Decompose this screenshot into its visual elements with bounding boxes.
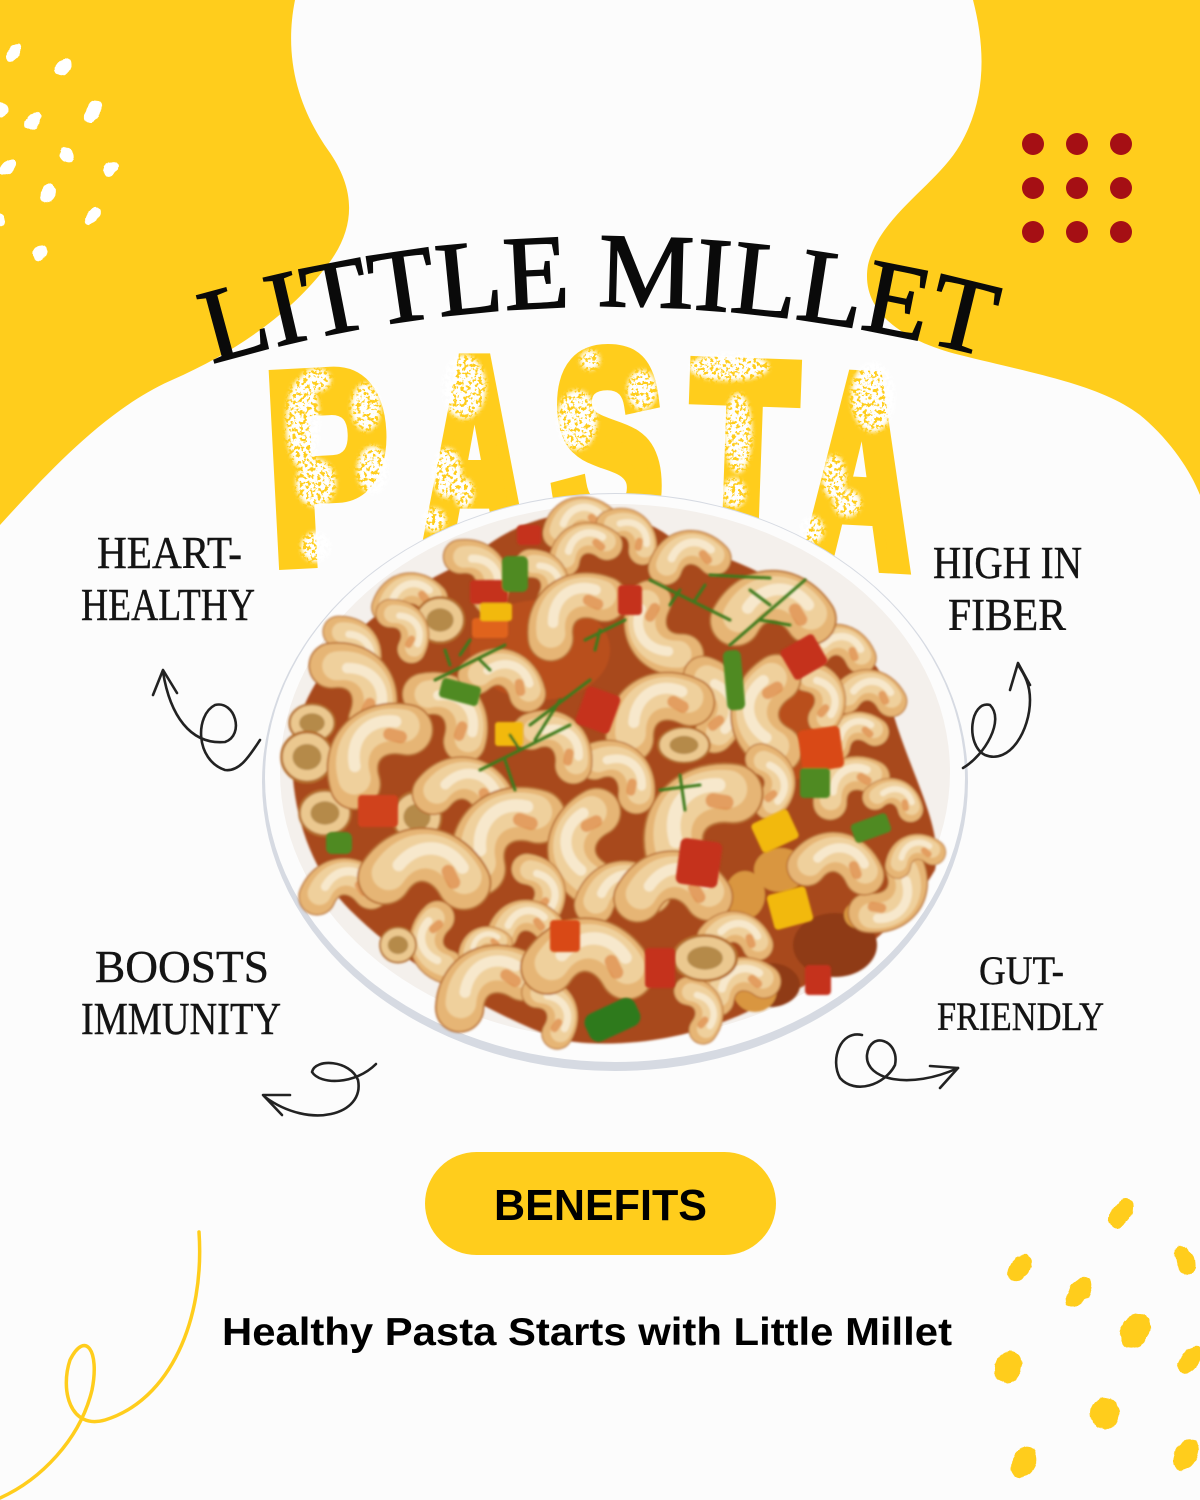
yellow blob: top left bbox=[0, 0, 349, 525]
white speckles: top left bbox=[0, 40, 121, 263]
label: high in fiber bbox=[933, 537, 1082, 640]
pasta food pile bbox=[282, 505, 936, 1044]
label: gut-friendly bbox=[937, 948, 1104, 1039]
vegetables and herbs bbox=[326, 525, 892, 1045]
title word: PASTA: A bbox=[424, 306, 525, 601]
arrow: high in fiber bbox=[963, 663, 1030, 768]
yellow swirl: bottom left bbox=[0, 1232, 200, 1498]
title word: PASTA: S bbox=[553, 299, 662, 594]
label: high in fiber: HIGH IN bbox=[933, 537, 1082, 588]
label: high in fiber: FIBER bbox=[948, 589, 1066, 640]
label: gut-friendly: GUT- bbox=[979, 948, 1064, 993]
yellow blob: top right bbox=[867, 0, 1200, 495]
title word: PASTA: T bbox=[686, 308, 800, 607]
label: boosts immunity: IMMUNITY bbox=[81, 993, 281, 1044]
title line: LITTLE MILLET: LITTLE MILLET bbox=[196, 236, 1003, 364]
label: boosts immunity: BOOSTS bbox=[95, 941, 269, 992]
title word: PASTA bbox=[261, 299, 920, 621]
plate and pasta photo bbox=[262, 493, 968, 1071]
label: boosts immunity bbox=[81, 941, 281, 1044]
arrow: heart-healthy bbox=[153, 670, 260, 770]
title word: PASTA: P bbox=[261, 316, 396, 617]
benefits button bbox=[425, 1152, 776, 1255]
title word: PASTA: A bbox=[800, 321, 920, 621]
red dot grid: top right bbox=[1022, 133, 1132, 243]
label: gut-friendly: FRIENDLY bbox=[937, 994, 1104, 1039]
arrow: boosts immunity bbox=[263, 1063, 376, 1115]
label: heart-healthy: HEALTHY bbox=[81, 579, 255, 630]
plate bbox=[262, 493, 968, 1071]
benefits button: BENEFITS bbox=[494, 1181, 707, 1230]
yellow dabs: bottom right bbox=[989, 1194, 1200, 1482]
arrow: gut-friendly bbox=[836, 1034, 958, 1088]
label: heart-healthy bbox=[81, 527, 255, 630]
tagline: Healthy Pasta Starts with Little Millet bbox=[222, 1311, 952, 1354]
label: heart-healthy: HEART- bbox=[97, 527, 242, 578]
